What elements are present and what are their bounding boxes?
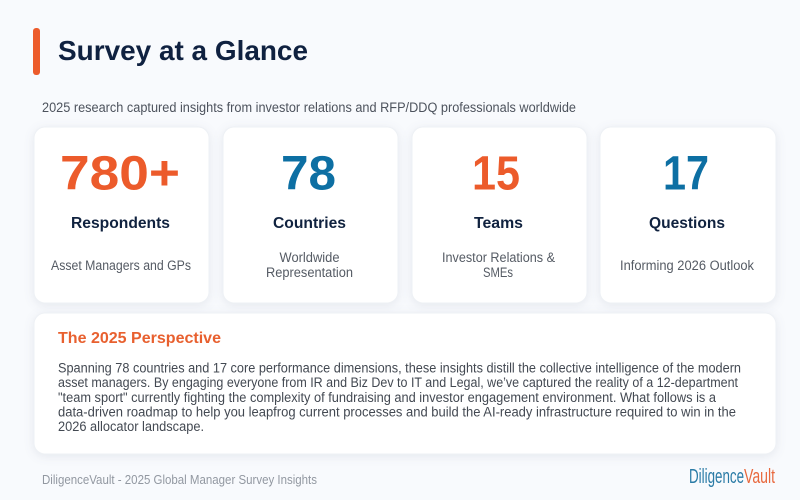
label: countries: Countries xyxy=(273,215,346,232)
description: countries: Representation xyxy=(266,265,353,280)
logo: DiligenceVault: Diligence xyxy=(689,466,744,488)
number: 17: 17 xyxy=(663,148,709,200)
panel heading: The 2025 Perspective xyxy=(58,330,221,347)
body text: data-driven roadmap to help you leapfrog current processes and build the AI-ready infrastructure required to win in the xyxy=(58,404,736,420)
body text: "team sport" currently fighting the complexity of fundraising and investor engagement environment. What follows is a xyxy=(58,390,716,405)
description: teams: Investor Relations & xyxy=(442,250,555,265)
description: respondents: Asset Managers and GPs xyxy=(51,258,191,273)
label: teams: Teams xyxy=(474,215,523,232)
description: teams xyxy=(442,250,555,280)
panel: teams xyxy=(412,127,587,303)
body text xyxy=(58,360,741,434)
number: 78: 78 xyxy=(281,148,336,200)
body text: Spanning 78 countries and 17 core performance dimensions, these insights distill the collective intelligence of the modern xyxy=(58,360,741,376)
description: countries xyxy=(266,250,353,280)
title: Survey at a Glance xyxy=(58,35,308,66)
panel: countries xyxy=(223,127,398,303)
panel: respondents xyxy=(34,127,209,303)
label: respondents: Respondents xyxy=(71,215,170,232)
accent bar xyxy=(33,28,40,75)
subtitle: 2025 research captured insights from investor relations and RFP/DDQ professionals worldwide xyxy=(42,100,576,115)
panel: the 2025 perspective xyxy=(34,313,776,454)
footer text: DiligenceVault - 2025 Global Manager Survey Insights xyxy=(42,473,317,487)
body text: 2026 allocator landscape. xyxy=(58,419,204,434)
label: questions: Questions xyxy=(649,215,725,232)
description: teams: SMEs xyxy=(483,265,513,280)
panel: questions xyxy=(600,127,776,303)
body text: asset managers. By engaging everyone from IR and Biz Dev to IT and Legal, we’ve captured the reality of a 12-department xyxy=(58,375,738,390)
number: 780+: 780+ xyxy=(60,148,180,200)
description: questions: Informing 2026 Outlook xyxy=(620,258,754,273)
number: 15: 15 xyxy=(472,148,520,200)
description: countries: Worldwide xyxy=(280,250,340,265)
logo: DiligenceVault: Vault xyxy=(744,466,775,488)
